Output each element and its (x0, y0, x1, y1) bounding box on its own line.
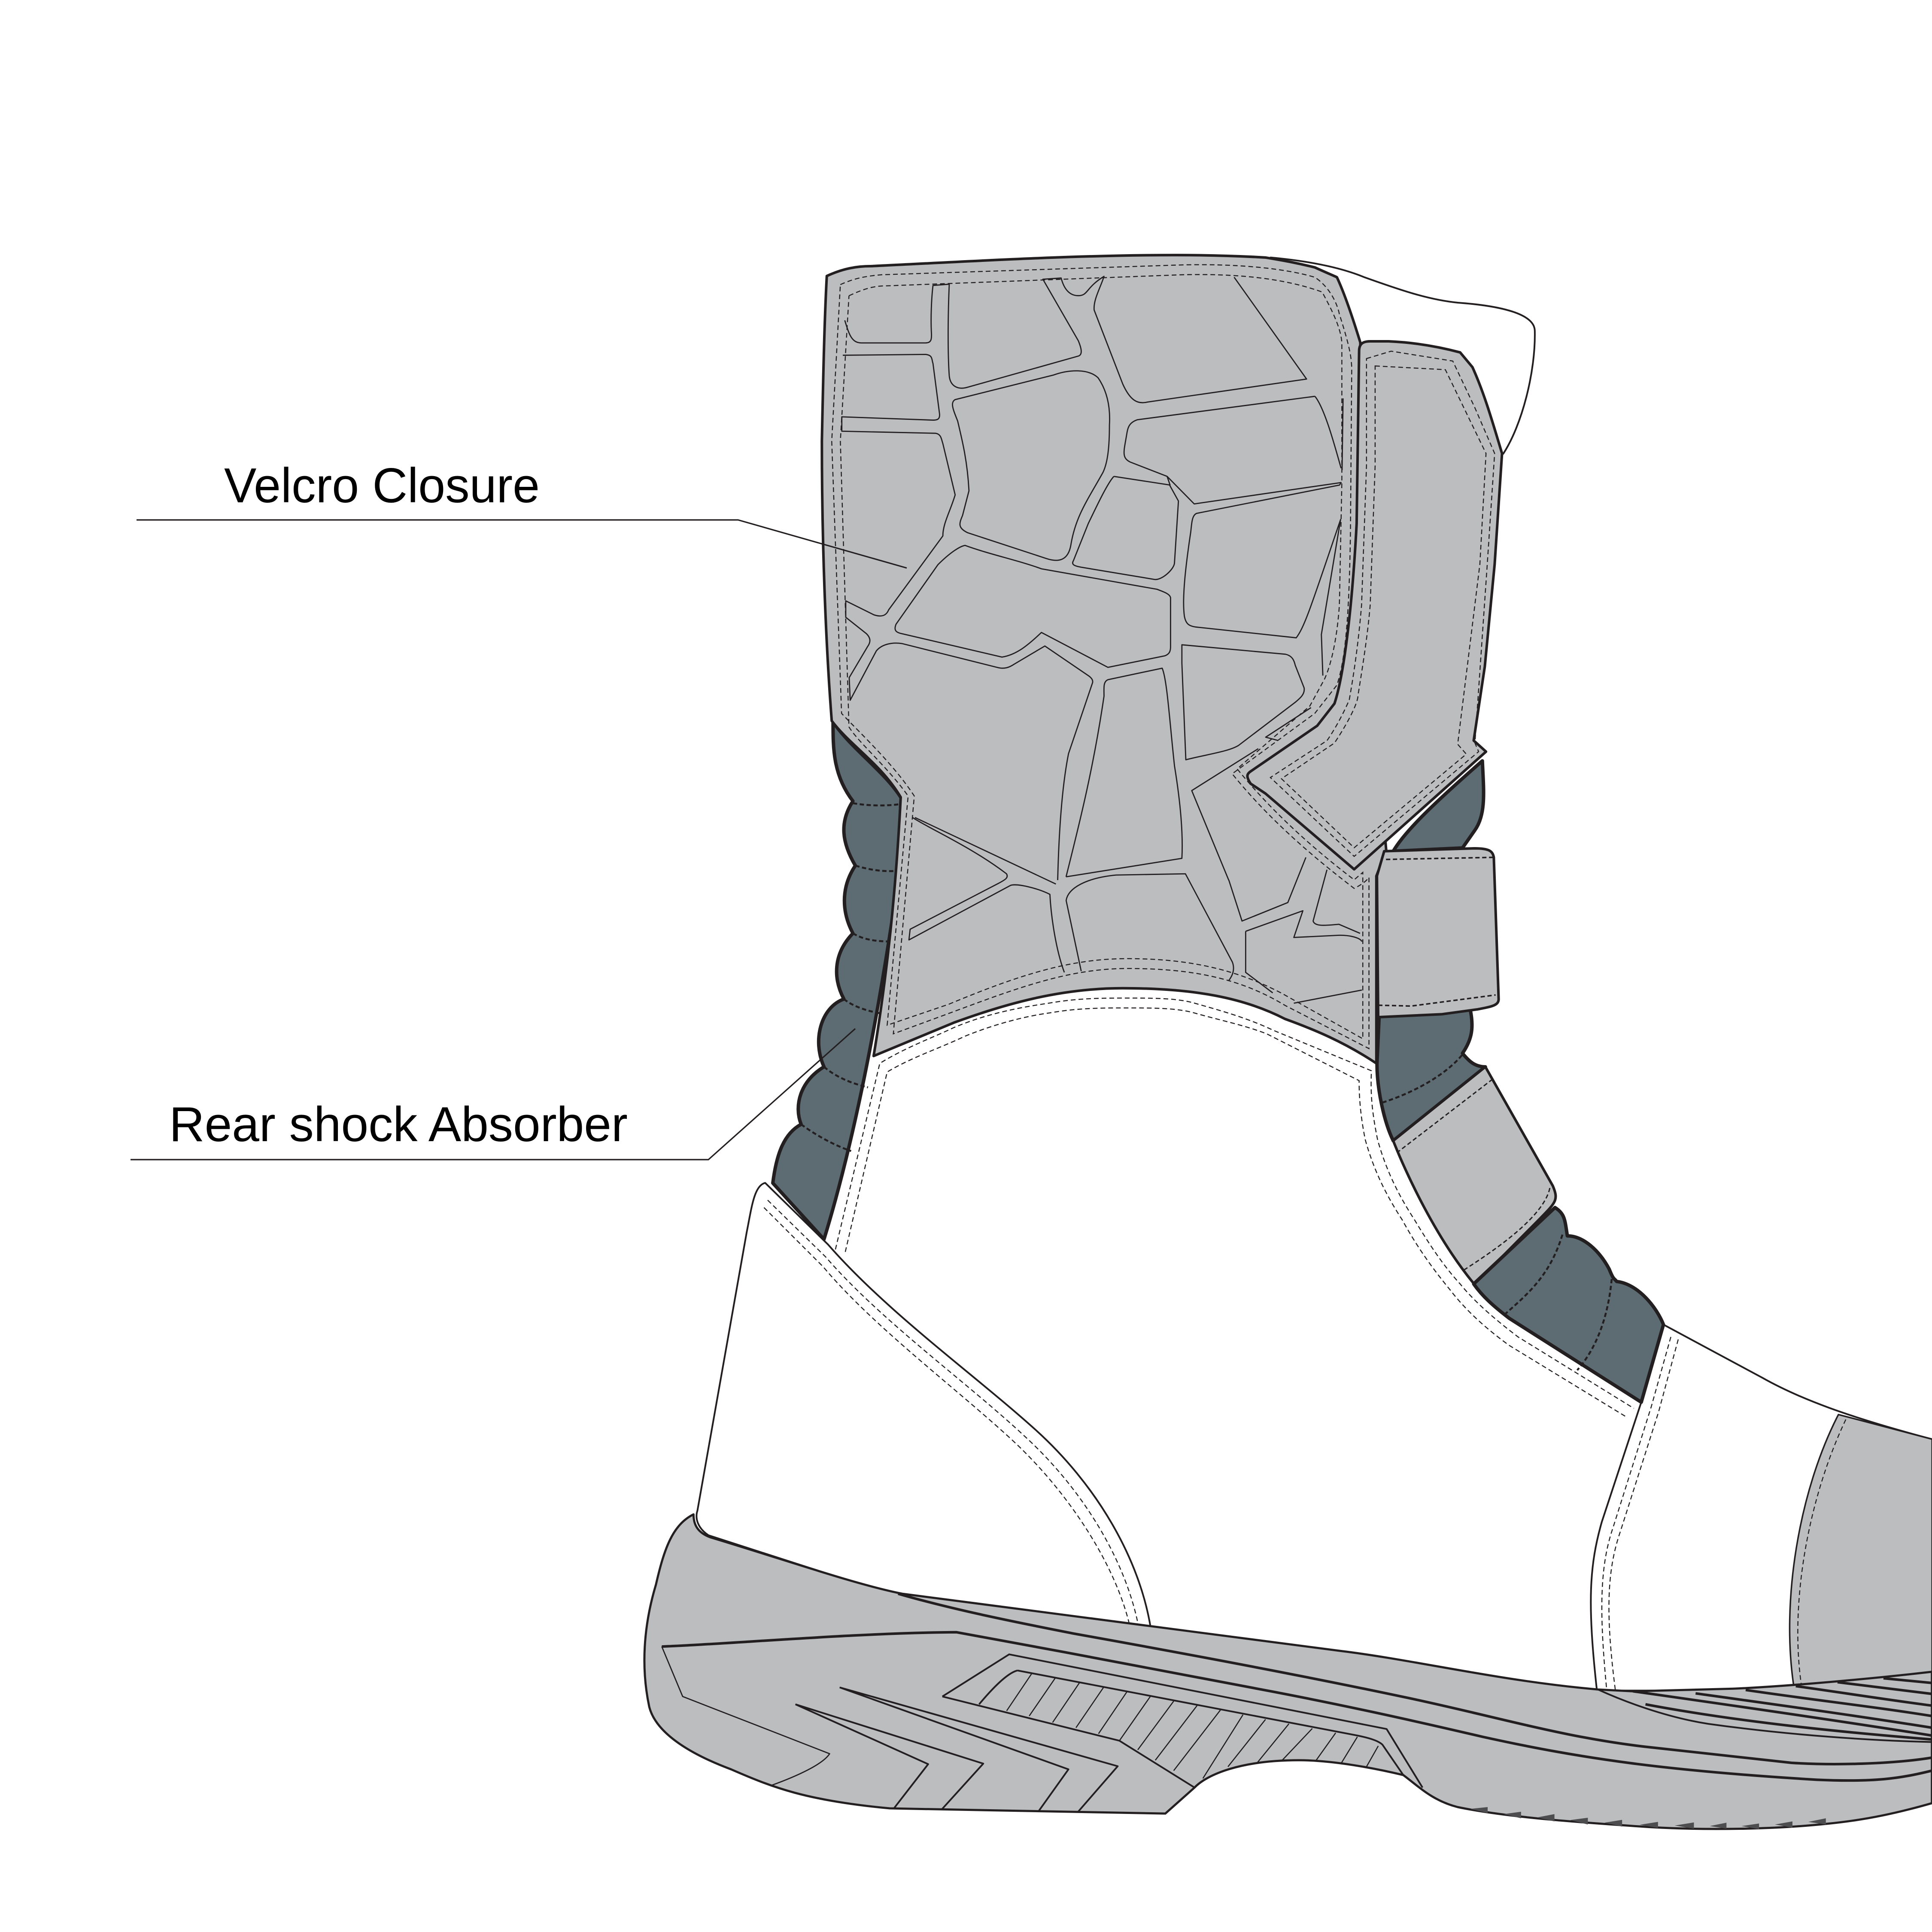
leader line: Rear shock Absorber (131, 1029, 855, 1160)
rear shock absorber: left accordion (773, 722, 901, 1239)
callout: Rear shock Absorber (131, 1029, 855, 1160)
midsole lines (662, 1594, 1932, 1786)
lower shock absorber (1474, 1208, 1663, 1402)
heel chevrons (796, 1654, 1422, 1812)
right shock absorber sections (1377, 761, 1485, 1141)
tread teeth (1470, 1807, 1826, 1829)
ankle strap (1377, 848, 1499, 1017)
label: Velcro Closure: Velcro Closure (224, 459, 540, 513)
outsole (644, 1514, 1932, 1829)
velcro cuff panel (822, 255, 1386, 1063)
white heel counter (696, 1183, 1151, 1629)
forefoot sole lines (1598, 1678, 1932, 1742)
cuff stitching (832, 265, 1369, 1048)
leader line: Velcro Closure (137, 520, 907, 568)
label: Rear shock Absorber: Rear shock Absorber (169, 1097, 628, 1152)
cuff body (822, 255, 1386, 1063)
white and grey toe panels (1591, 1324, 1932, 1691)
velcro flap (1247, 341, 1502, 869)
callout: Velcro Closure (137, 459, 907, 568)
boot illustration (644, 255, 1932, 1829)
arch hatching (979, 1671, 1403, 1778)
white ankle panel (789, 998, 1641, 1694)
lower crack pattern (909, 817, 1362, 1003)
upper crack pattern (842, 276, 1343, 880)
grey ankle band (1393, 1067, 1555, 1285)
heel collar liner behind cuff (1270, 258, 1535, 454)
